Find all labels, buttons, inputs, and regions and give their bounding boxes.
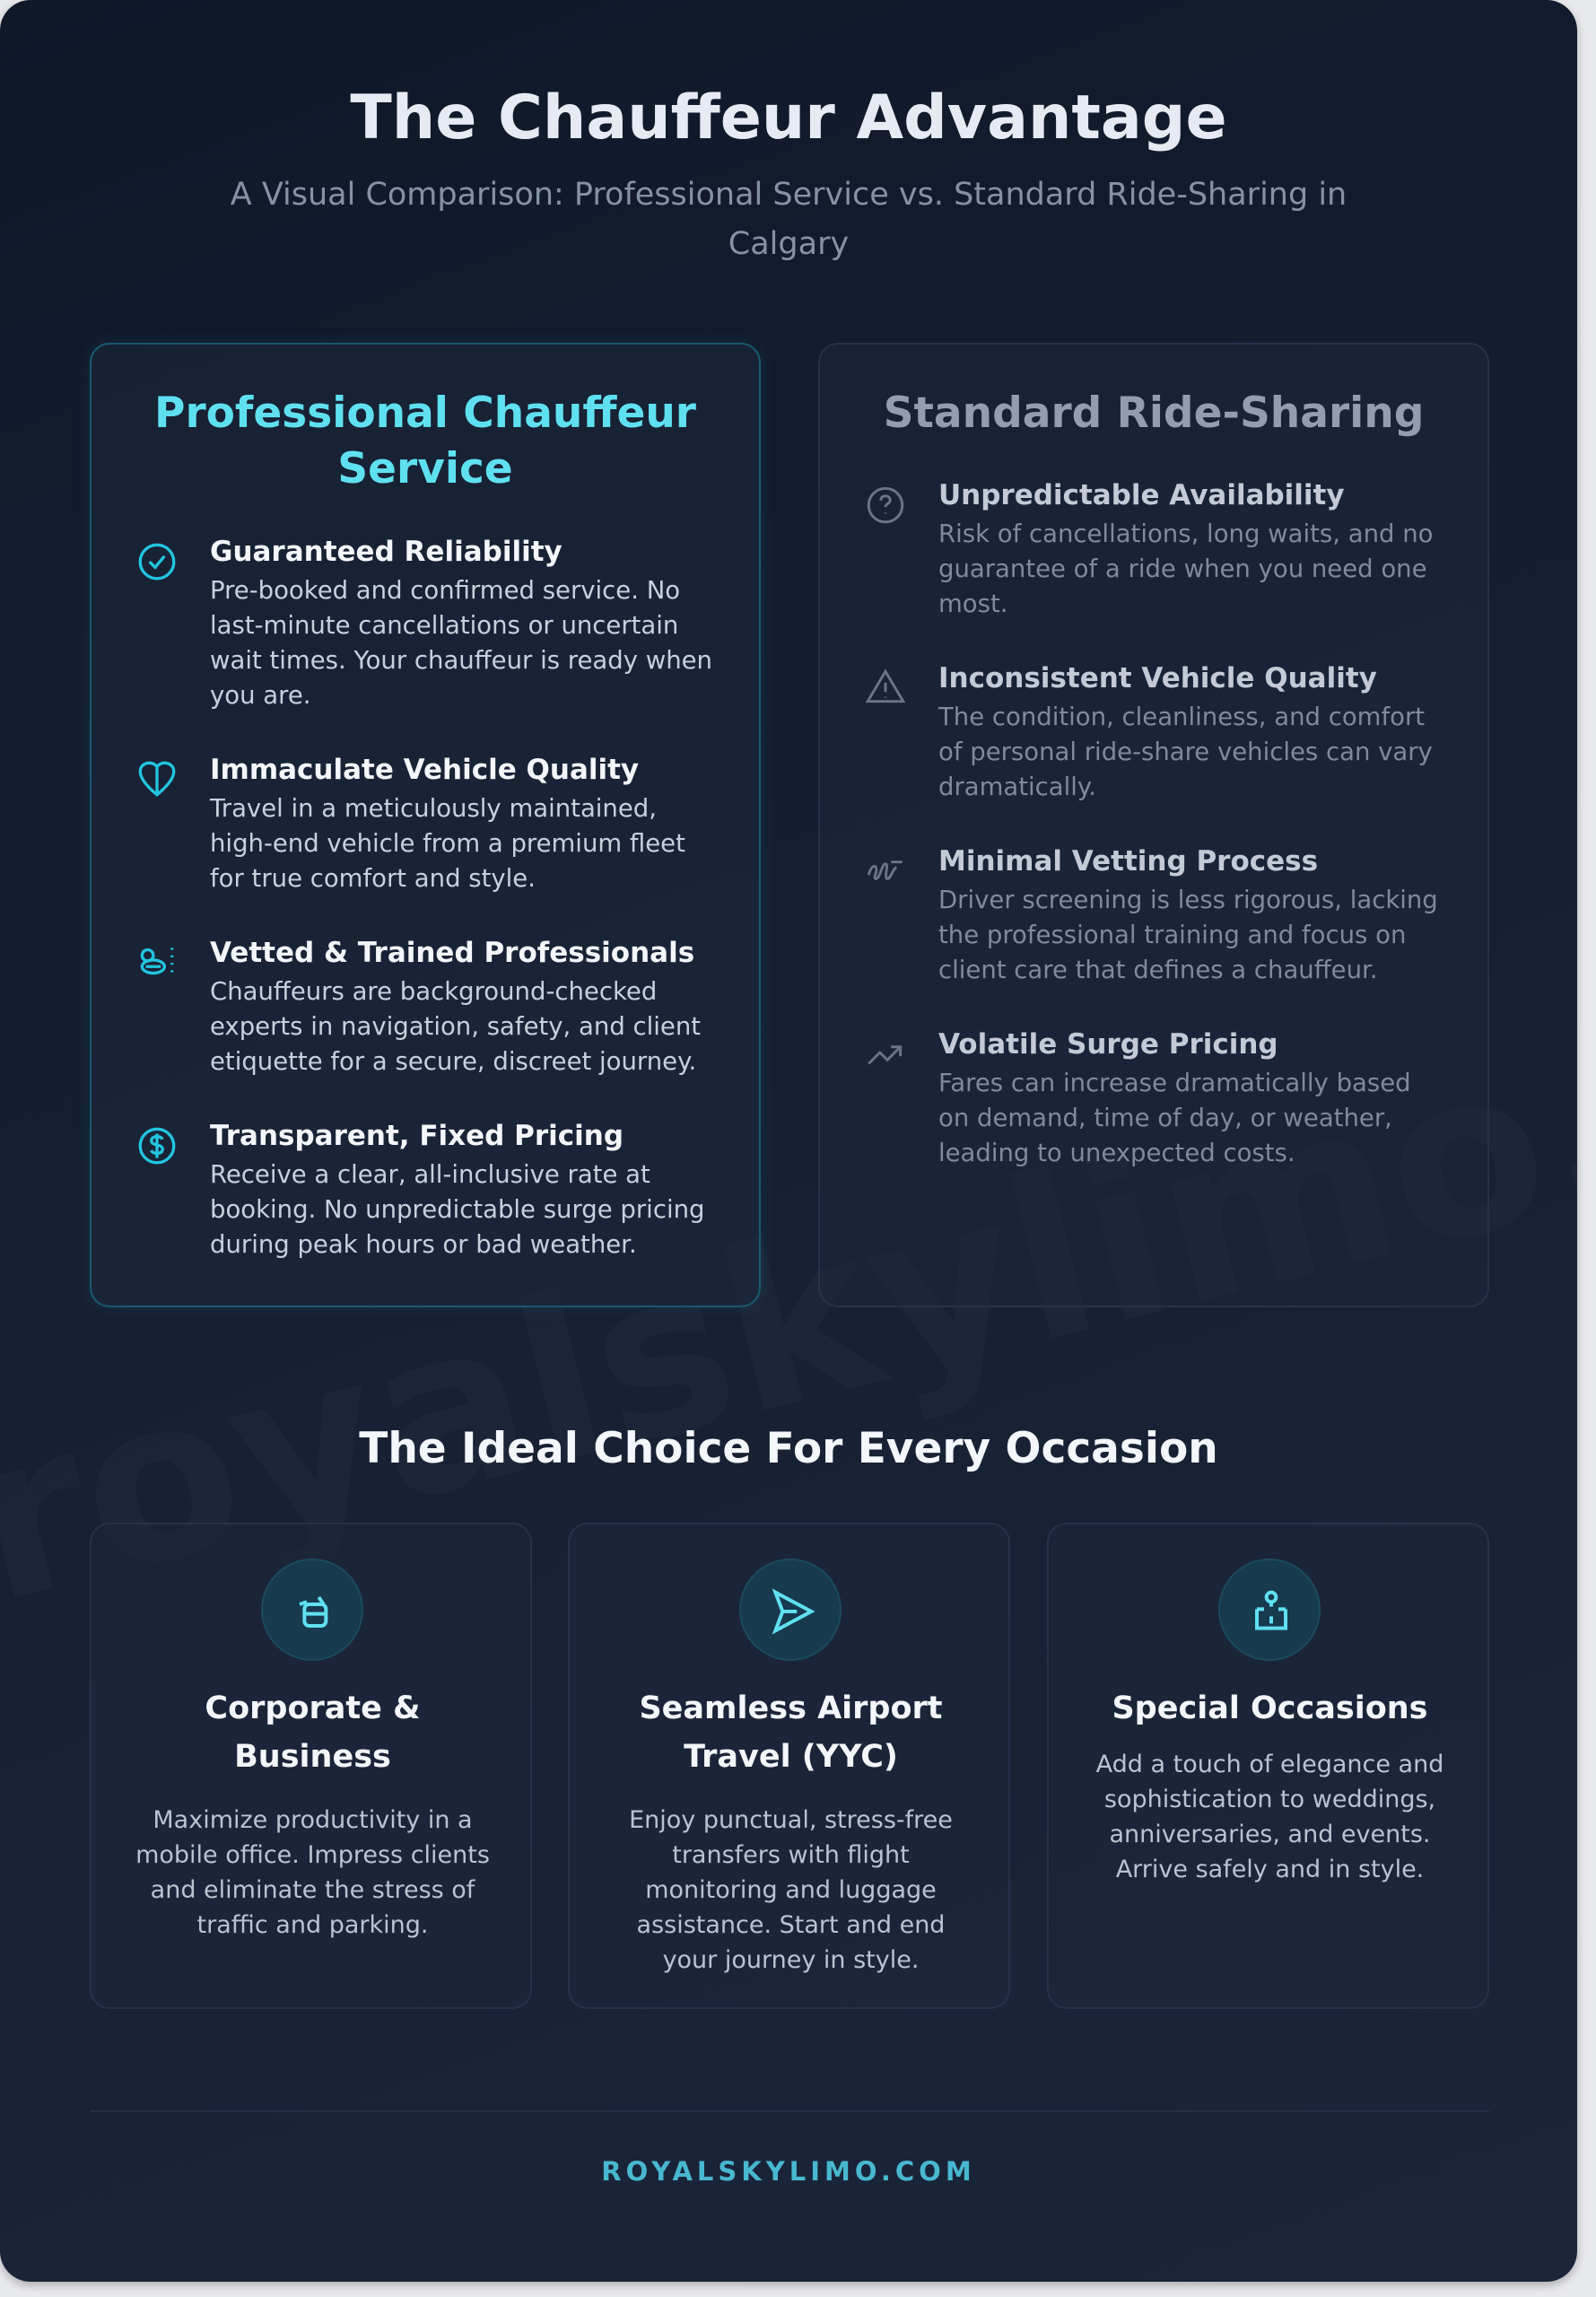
title: The Chauffeur Advantage — [350, 83, 1227, 153]
panel: professional chauffeur service: Guaranteed Reliability — [210, 536, 563, 568]
icon: person podium — [1218, 1559, 1321, 1661]
card: airport: Seamless Airport — [639, 1690, 943, 1726]
card: special occasions: Special Occasions — [1112, 1690, 1428, 1726]
card: corporate: Corporate & — [205, 1690, 421, 1726]
icon: briefcase cup — [261, 1559, 363, 1661]
item: vehicle quality — [138, 754, 685, 893]
panel: professional chauffeur service: Transparent, Fixed Pricing — [210, 1120, 624, 1152]
panel heading: professional: Service — [337, 444, 513, 493]
card: corporate: Maximize productivity in a mobile office. Impress clients and eliminate the stress of traffic and parking. — [135, 1806, 490, 1939]
panel: standard ride-sharing — [818, 343, 1489, 1307]
panel: professional chauffeur service — [90, 343, 761, 1307]
panel: standard ride-sharing: Volatile Surge Pricing — [938, 1028, 1278, 1061]
card: airport — [568, 1523, 1010, 2009]
item: surge pricing — [868, 1028, 1411, 1167]
panel: professional chauffeur service: Travel in a meticulously maintained, high‑end vehicle from a premium fleet for true comfort and style. — [210, 794, 685, 893]
item: inconsistent quality — [865, 662, 1433, 801]
panel: standard ride-sharing: Risk of cancellations, long waits, and no guarantee of a ride when you need one most. — [938, 520, 1433, 618]
panel: standard ride-sharing: Fares can increase dramatically based on demand, time of day, or weather, leading to unexpected costs. — [938, 1069, 1411, 1167]
panel: professional chauffeur service: Pre-booked and confirmed service. No last‑minute cancellations or uncertain wait times. Your chauffeur is ready when you are. — [210, 576, 712, 710]
panel heading: professional: Professional Chauffeur — [154, 389, 696, 438]
panel: professional chauffeur service: Receive a clear, all‑inclusive rate at booking. No unpredictable surge pricing during peak hours or bad weather. — [210, 1160, 704, 1259]
panel: standard ride-sharing: of personal ride‑share vehicles can vary dramatically. — [938, 738, 1433, 801]
card: airport: Enjoy punctual, stress‑free transfers with flight monitoring and luggage assistance. Start and end your journey in style. — [629, 1806, 953, 1974]
item: vetted professionals — [140, 937, 701, 1076]
panel: standard ride-sharing: Minimal Vetting Process — [938, 845, 1318, 878]
panel heading: ride-sharing: Standard Ride-Sharing — [884, 389, 1424, 438]
panel: professional chauffeur service: Vetted & Trained Professionals — [210, 937, 694, 969]
panel: professional chauffeur service: Immaculate Vehicle Quality — [210, 754, 639, 786]
item: guaranteed reliability — [138, 536, 712, 710]
card: special occasions — [1047, 1523, 1489, 2009]
panel: professional chauffeur service: Chauffeurs are background‑checked experts in navigation, safety, and client etiquette for a secure, discreet journey. — [210, 977, 701, 1076]
panel: standard ride-sharing: Unpredictable Availability — [938, 479, 1345, 511]
panel: standard ride-sharing: Inconsistent Vehicle Quality — [938, 662, 1377, 694]
item: minimal vetting — [867, 845, 1438, 984]
panel heading: professional — [154, 389, 696, 493]
card: corporate: Business — [234, 1739, 391, 1775]
item: fixed pricing — [138, 1120, 704, 1259]
card: corporate — [90, 1523, 532, 2009]
item: unpredictable availability — [867, 479, 1433, 618]
icon: paper plane — [739, 1559, 842, 1661]
card: airport: Travel (YYC) — [684, 1739, 898, 1775]
section heading: The Ideal Choice For Every Occasion — [359, 1424, 1218, 1473]
panel: standard ride-sharing: Driver screening is less rigorous, lacking the professional training and focus on client care that defines a chauffeur. — [938, 886, 1438, 984]
subtitle: A Visual Comparison: Professional Service vs. Standard Ride-Sharing in Calgary — [231, 177, 1347, 262]
footer: ROYALSKYLIMO.COM — [601, 2156, 976, 2187]
card: special occasions: Add a touch of elegance and sophistication to weddings, anniversaries, and events. Arrive safely and in style. — [1096, 1751, 1443, 1883]
panel: standard ride-sharing: The condition, cleanliness, and comfort — [938, 703, 1425, 731]
